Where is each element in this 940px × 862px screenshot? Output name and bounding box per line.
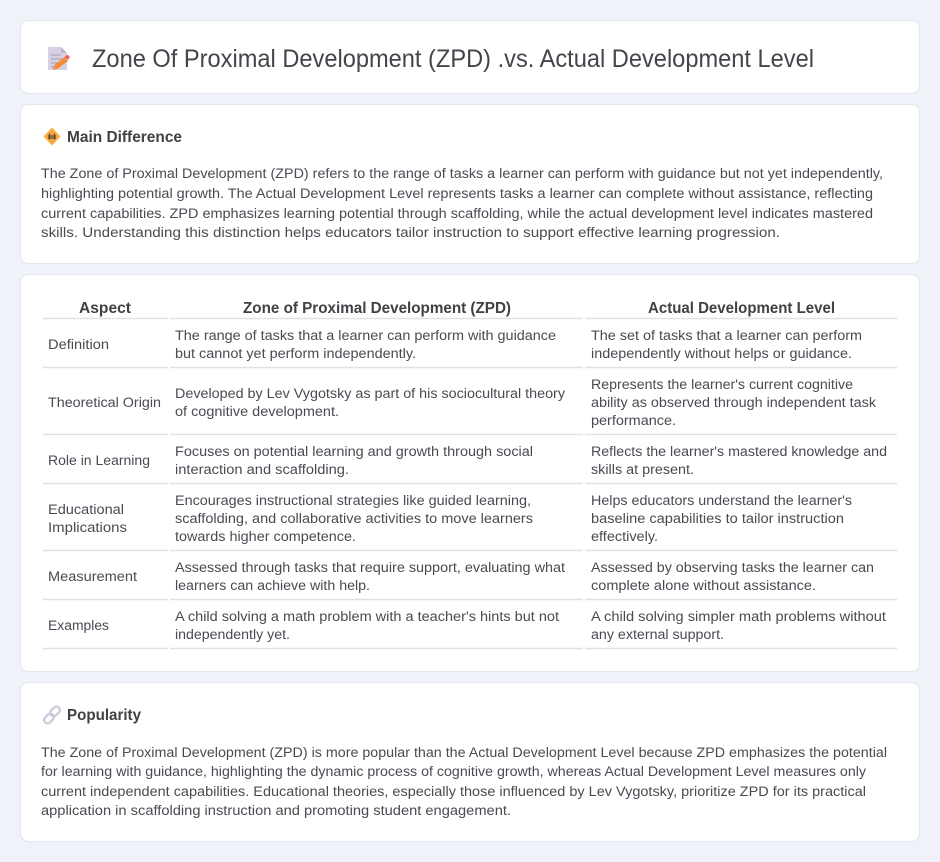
text block: main difference paragraph: skills. Understanding this distinction helps educators tailor instruction to support effective learning progression. (41, 225, 780, 241)
text block: main difference paragraph (41, 166, 883, 241)
row: educational implications: scaffolding, and collaborative activities to move learners (175, 511, 533, 527)
row: educational implications: effectively. (591, 529, 658, 545)
row: theoretical origin (48, 377, 877, 429)
row: role in learning: Role in Learning (48, 453, 150, 469)
row: role in learning: Focuses on potential learning and growth through social (175, 444, 533, 460)
panel: title header (20, 20, 920, 94)
table header (79, 300, 835, 317)
text block: main difference paragraph: The Zone of Proximal Development (ZPD) refers to the range of tasks a learner can perform with guidance but not yet independently, (41, 166, 883, 182)
row: definition: The range of tasks that a learner can perform with guidance (175, 328, 556, 344)
table header: Zone of Proximal Development (ZPD) (243, 300, 511, 317)
row: examples: independently yet. (175, 627, 290, 643)
row: examples: any external support. (591, 627, 724, 643)
row: definition: but cannot yet perform independently. (175, 346, 416, 362)
text block: main difference paragraph: current capabilities. ZPD emphasizes learning potential through scaffolding, while the actual development level indicates mastered (41, 206, 873, 222)
row: measurement: learners can achieve with help. (175, 578, 370, 594)
row: measurement: Assessed by observing tasks the learner can (591, 560, 874, 576)
text block: popularity paragraph: The Zone of Proximal Development (ZPD) is more popular than the Actual Development Level because ZPD emphasizes the potential (41, 745, 887, 761)
row: measurement: Assessed through tasks that require support, evaluating what (175, 560, 565, 576)
text block: popularity paragraph: current independent capabilities. Educational theories, especially those influenced by Lev Vygotsky, prioritize ZPD for its practical (41, 784, 866, 800)
icon: chain link (43, 705, 61, 725)
text block: main difference paragraph: highlighting potential growth. The Actual Development Level represents tasks a learner can complete without assistance, reflecting (41, 186, 873, 202)
row: theoretical origin: Developed by Lev Vygotsky as part of his sociocultural theory (175, 386, 566, 402)
row: measurement (48, 560, 874, 594)
row: educational implications: Educational (48, 502, 124, 518)
table header: Actual Development Level (648, 300, 835, 317)
row: definition: Definition (48, 337, 109, 353)
row: theoretical origin: Theoretical Origin (48, 395, 161, 411)
row: educational implications: Implications (48, 520, 127, 536)
title: Zone Of Proximal Development (ZPD) .vs. Actual Development Level (92, 45, 814, 73)
row: role in learning: interaction and scaffolding. (175, 462, 349, 478)
row: role in learning: Reflects the learner's mastered knowledge and (591, 444, 887, 460)
row: educational implications: Encourages instructional strategies like guided learning, (175, 493, 531, 509)
row: educational implications: towards higher competence. (175, 529, 356, 545)
text block: popularity paragraph: application in scaffolding instruction and promoting student engagement. (41, 803, 511, 819)
row: definition (48, 328, 862, 362)
row: educational implications: Helps educators understand the learner's (591, 493, 852, 509)
panel: main difference (20, 104, 920, 264)
row: definition: The set of tasks that a learner can perform (591, 328, 862, 344)
row: theoretical origin: Represents the learner's current cognitive (591, 377, 853, 393)
icon: orange diamond sign (44, 128, 60, 145)
text block: popularity paragraph: for learning with guidance, highlighting the dynamic process of cognitive growth, whereas Actual Development Level measures only (41, 764, 867, 780)
icon: document with pencil (48, 47, 70, 70)
text block: popularity paragraph (41, 745, 887, 819)
row: examples: A child solving simpler math problems without (591, 609, 886, 625)
panel: popularity (20, 682, 920, 842)
table header: Aspect (79, 300, 132, 317)
panel: comparison table (20, 274, 920, 672)
row: measurement: Measurement (48, 569, 137, 585)
row: examples: A child solving a math problem with a teacher's hints but not (175, 609, 559, 625)
row: educational implications (48, 493, 852, 545)
row: theoretical origin: performance. (591, 413, 676, 429)
heading: popularity: Popularity (67, 707, 141, 724)
row: examples (48, 609, 886, 643)
row: theoretical origin: of cognitive development. (175, 404, 339, 420)
row: examples: Examples (48, 618, 109, 634)
row: measurement: complete alone without assistance. (591, 578, 816, 594)
row: theoretical origin: ability as observed through independent task (591, 395, 877, 411)
row: role in learning (48, 444, 887, 478)
heading: main difference: Main Difference (67, 129, 182, 146)
row: role in learning: skills at present. (591, 462, 694, 478)
row: definition: independently without helps or guidance. (591, 346, 852, 362)
row: educational implications: baseline capabilities to tailor instruction (591, 511, 844, 527)
